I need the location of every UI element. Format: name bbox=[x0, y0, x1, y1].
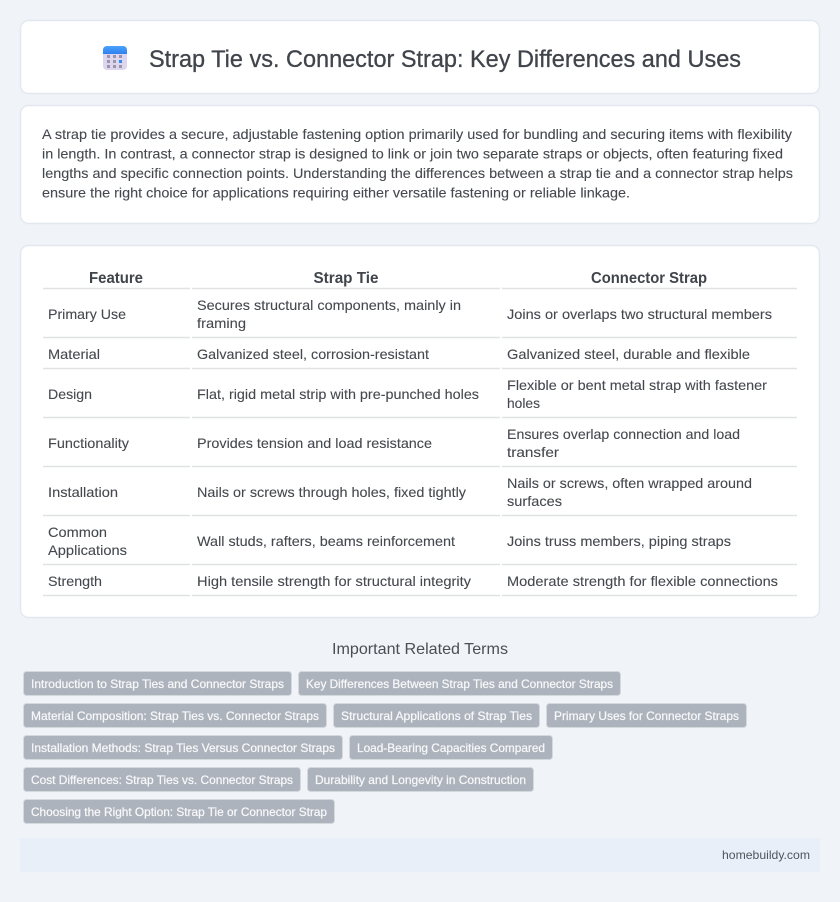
heading: important related terms: Important Related Terms bbox=[332, 641, 508, 658]
row: common applications: Wall studs, rafters, beams reinforcement bbox=[197, 533, 455, 549]
row: functionality: Ensures overlap connection and load bbox=[507, 426, 740, 442]
row: design: Flexible or bent metal strap with fastener bbox=[507, 377, 767, 393]
table header bbox=[89, 270, 707, 287]
row: installation: Nails or screws through holes, fixed tightly bbox=[197, 484, 466, 500]
row: functionality: Provides tension and load resistance bbox=[197, 435, 432, 451]
panel: header bbox=[20, 20, 820, 94]
related term tags: Installation Methods: Strap Ties Versus Connector Straps bbox=[31, 741, 335, 755]
row: strength: High tensile strength for structural integrity bbox=[197, 573, 471, 589]
row: strength: Moderate strength for flexible connections bbox=[507, 573, 778, 589]
row: common applications: Common bbox=[48, 524, 107, 540]
row: installation: Nails or screws, often wrapped around bbox=[507, 475, 752, 491]
table header: Connector Strap bbox=[591, 270, 707, 287]
row: material: Galvanized steel, corrosion-resistant bbox=[197, 346, 429, 362]
intro text bbox=[42, 126, 793, 200]
related term tags: Load-Bearing Capacities Compared bbox=[357, 741, 545, 755]
related term tags bbox=[24, 672, 746, 824]
row: material: Galvanized steel, durable and flexible bbox=[507, 346, 750, 362]
row: strength bbox=[48, 573, 778, 589]
intro text: A strap tie provides a secure, adjustable fastening option primarily used for bundling and securing items with flexibility bbox=[42, 126, 792, 142]
related term tags: Choosing the Right Option: Strap Tie or Connector Strap bbox=[31, 805, 327, 819]
intro text: lengths and specific connection points. Understanding the differences between a strap tie and a connector strap helps bbox=[42, 165, 793, 181]
related term tags: Primary Uses for Connector Straps bbox=[554, 709, 739, 723]
related term tags: Structural Applications of Strap Ties bbox=[341, 709, 532, 723]
row: primary use: Primary Use bbox=[48, 306, 126, 322]
related term tags: Introduction to Strap Ties and Connector Straps bbox=[31, 677, 284, 691]
table header: Feature bbox=[89, 270, 143, 287]
row: primary use: Secures structural components, mainly in bbox=[197, 297, 461, 313]
row: installation: surfaces bbox=[507, 493, 562, 509]
intro text: ensure the right choice for applications requiring either versatile fastening or reliable linkage. bbox=[42, 184, 630, 200]
title: Strap Tie vs. Connector Strap: Key Differences and Uses bbox=[149, 46, 741, 73]
row: functionality: transfer bbox=[507, 444, 559, 460]
row: common applications bbox=[48, 524, 731, 558]
row: primary use: Joins or overlaps two structural members bbox=[507, 306, 772, 322]
row: design bbox=[48, 377, 767, 411]
row: primary use bbox=[48, 297, 772, 331]
row: installation bbox=[48, 475, 752, 509]
row: design: Flat, rigid metal strip with pre-punched holes bbox=[197, 386, 479, 402]
row: design: holes bbox=[507, 395, 540, 411]
panel: comparison table bbox=[20, 246, 820, 618]
related term tags: Material Composition: Strap Ties vs. Connector Straps bbox=[31, 709, 319, 723]
row: common applications: Applications bbox=[48, 542, 127, 558]
intro text: in length. In contrast, a connector strap is designed to link or join two separate straps or objects, often featuring fixed bbox=[42, 146, 783, 162]
icon: calendar bbox=[103, 46, 127, 70]
footer bbox=[20, 838, 820, 872]
row: installation: Installation bbox=[48, 484, 118, 500]
row: material bbox=[48, 346, 750, 362]
row: primary use: framing bbox=[197, 315, 246, 331]
row: common applications: Joins truss members, piping straps bbox=[507, 533, 731, 549]
row: functionality bbox=[48, 426, 740, 460]
related term tags: Cost Differences: Strap Ties vs. Connector Straps bbox=[31, 773, 293, 787]
related term tags: Key Differences Between Strap Ties and Connector Straps bbox=[306, 677, 613, 691]
row: strength: Strength bbox=[48, 573, 102, 589]
row: design: Design bbox=[48, 386, 92, 402]
panel: introduction bbox=[20, 106, 820, 224]
table header: Strap Tie bbox=[314, 270, 379, 287]
row: material: Material bbox=[48, 346, 100, 362]
row: functionality: Functionality bbox=[48, 435, 129, 451]
footer: homebuildy.com bbox=[722, 848, 810, 862]
related term tags: Durability and Longevity in Construction bbox=[315, 773, 526, 787]
